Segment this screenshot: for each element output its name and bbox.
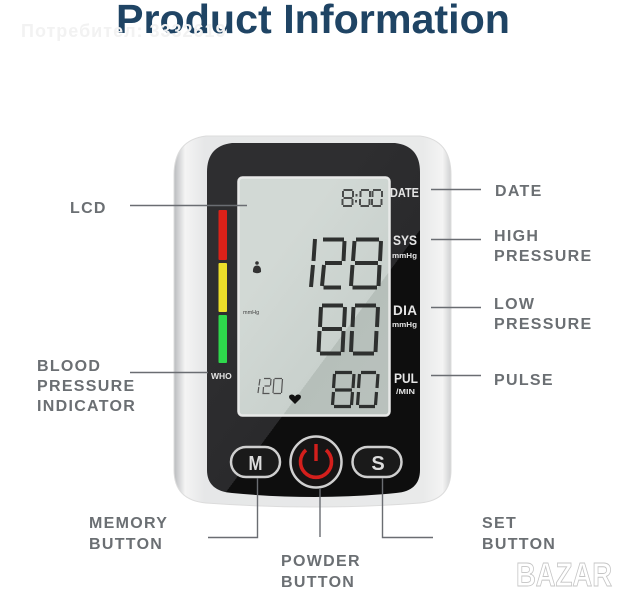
who label: WHO	[211, 371, 232, 381]
callout: blood pressure indicator: BLOOD	[37, 358, 101, 375]
panel label pul: /MIN	[396, 387, 415, 396]
callout: memory button: BUTTON	[89, 536, 163, 553]
black panel	[207, 143, 420, 497]
blood pressure colour bar	[218, 210, 227, 363]
callout: blood pressure indicator: INDICATOR	[37, 398, 136, 415]
callout: pulse	[431, 372, 554, 389]
icon: heart	[289, 394, 301, 404]
lcd memory value 120	[258, 378, 282, 394]
lcd pulse 80	[332, 372, 378, 406]
panel label dia: DIA	[393, 303, 417, 318]
callout: set button	[382, 478, 556, 553]
callout: low pressure	[431, 296, 592, 333]
callout: high pressure	[431, 228, 592, 265]
panel label sys	[392, 233, 417, 260]
callout: memory button: MEMORY	[89, 515, 168, 532]
panel label pul: PUL	[394, 371, 418, 386]
icon: person	[253, 261, 261, 273]
blood pressure monitor	[174, 136, 451, 507]
callout: powder button	[281, 488, 361, 591]
set button: S	[371, 453, 385, 475]
power button	[290, 436, 342, 488]
panel label date: DATE	[390, 185, 419, 200]
callout: date	[431, 183, 543, 200]
watermark: user text: Потребител: 3332619	[21, 21, 227, 41]
lcd time 8:00	[342, 190, 382, 206]
panel label dia: mmHg	[392, 320, 417, 329]
callout: memory button	[89, 478, 258, 553]
callout: powder button: BUTTON	[281, 574, 355, 591]
callout: set button: BUTTON	[482, 536, 556, 553]
panel label pul	[394, 371, 418, 396]
callout: date: DATE	[495, 183, 543, 200]
lcd unit mmHg: mmHg	[243, 310, 259, 316]
lcd systolic 128	[311, 239, 381, 288]
memory button	[231, 447, 280, 477]
callout: powder button: POWDER	[281, 553, 361, 570]
callout: low pressure: PRESSURE	[494, 316, 592, 333]
panel label sys: SYS	[393, 233, 417, 248]
callout: blood pressure indicator: PRESSURE	[37, 378, 135, 395]
callout: high pressure: HIGH	[494, 228, 539, 245]
device body	[174, 136, 451, 507]
callout: low pressure: LOW	[494, 296, 535, 313]
callout: high pressure: PRESSURE	[494, 248, 592, 265]
callout: lcd: LCD	[70, 200, 107, 217]
lcd screen	[238, 178, 390, 416]
memory button: M	[248, 453, 262, 475]
set button	[352, 447, 402, 477]
panel label dia	[392, 303, 417, 329]
callout: set button: SET	[482, 515, 517, 532]
lcd diastolic 80	[318, 306, 378, 354]
callout: pulse: PULSE	[494, 372, 554, 389]
callout: blood pressure indicator	[37, 358, 208, 415]
panel label sys: mmHg	[392, 251, 417, 260]
